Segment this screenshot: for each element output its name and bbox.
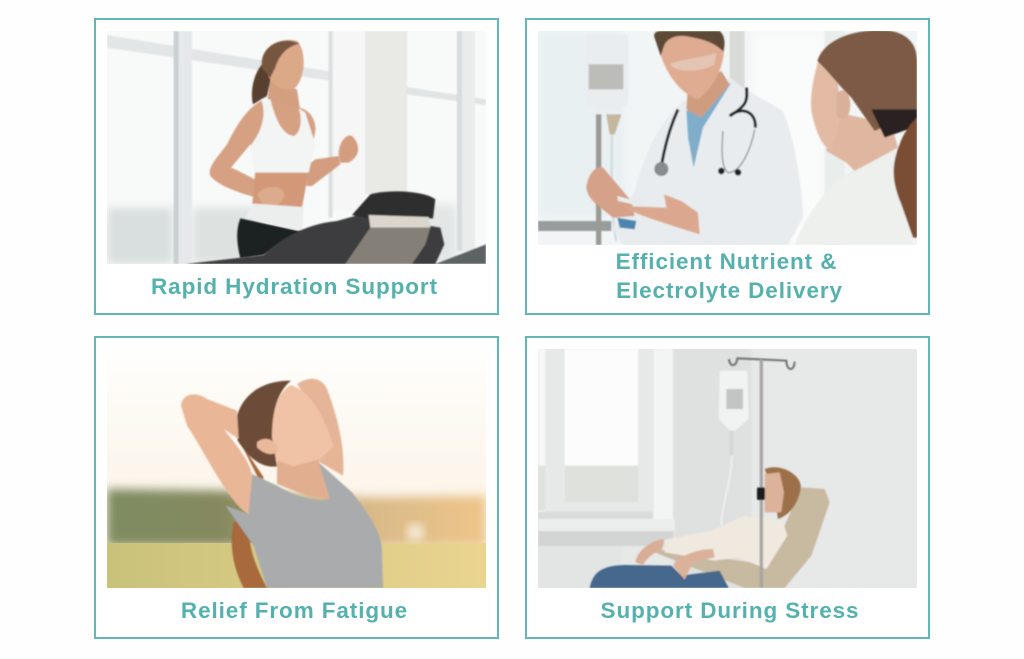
- photo: woman running on treadmill: [107, 31, 486, 264]
- caption: Relief From Fatigue: [181, 598, 408, 623]
- photo: woman resting in chair with iv drip: [538, 349, 917, 588]
- iv stand and bag: [719, 358, 795, 526]
- panel: rapid hydration support: [94, 18, 499, 315]
- patient: [795, 30, 917, 245]
- doctor: [586, 31, 803, 245]
- woman: [181, 379, 383, 588]
- photo: woman stretching in sunny field: [107, 377, 486, 588]
- iv bag: [586, 35, 628, 112]
- woman: [210, 40, 358, 258]
- treadmill: [185, 191, 486, 264]
- panel: relief from fatigue: [94, 336, 499, 639]
- caption: Support During Stress: [601, 598, 859, 623]
- reclining woman: [590, 359, 830, 588]
- photo: doctor with iv bag and patient: [538, 31, 917, 245]
- caption: Rapid Hydration Support: [151, 274, 438, 299]
- caption: [616, 249, 843, 303]
- panel: support during stress: [525, 336, 930, 639]
- panel: efficient nutrient and electrolyte delivery: [525, 18, 930, 315]
- caption: Electrolyte Delivery: [616, 278, 843, 303]
- caption: Efficient Nutrient &: [616, 249, 837, 274]
